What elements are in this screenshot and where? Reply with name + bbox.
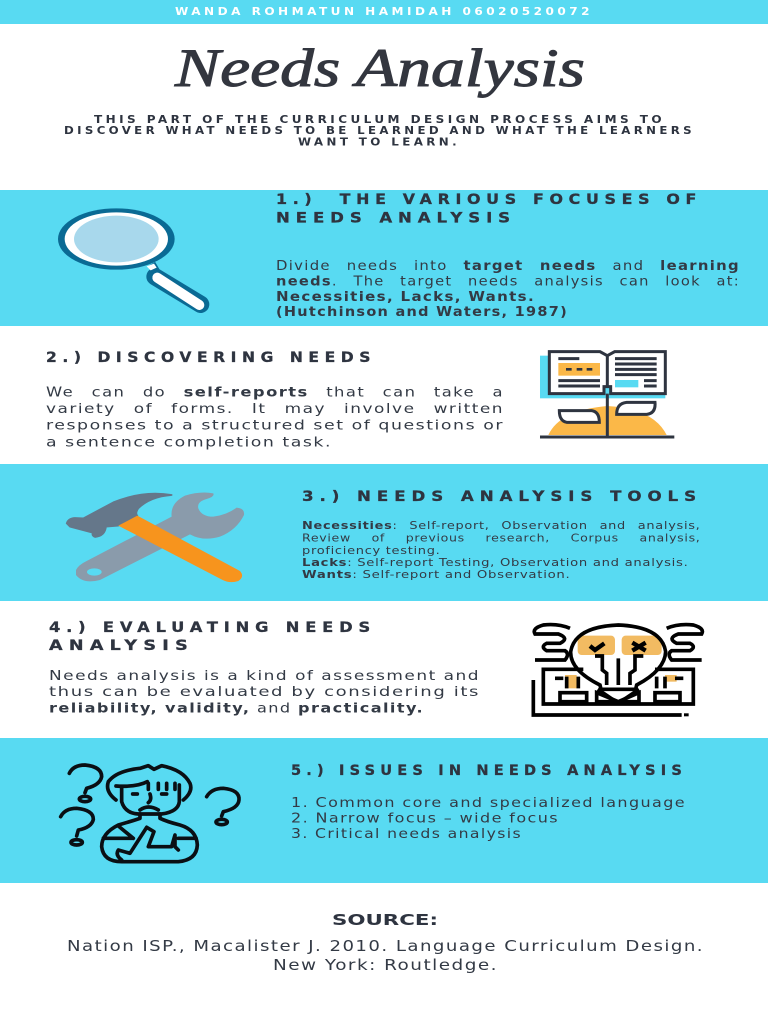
panel: various focuses — [0, 190, 768, 326]
text: section 2 body: responses to a structured set of questions or — [46, 418, 504, 434]
intro text: THIS PART OF THE CURRICULUM DESIGN PROCESS AIMS TO — [94, 114, 665, 126]
text: section 4 body — [49, 668, 480, 716]
text: section 1 body: Divide needs into target needs and learning — [276, 258, 740, 274]
heading: section 5: 5.) ISSUES IN NEEDS ANALYSIS — [291, 763, 687, 779]
text: section 4 body: thus can be evaluated by considering its — [49, 684, 480, 700]
text: section 3 body — [302, 519, 700, 581]
source — [67, 911, 704, 974]
header band — [0, 0, 768, 24]
intro text: WANT TO LEARN. — [298, 136, 460, 148]
source: New York: Routledge. — [273, 956, 498, 974]
heading: section 4: ANALYSIS — [49, 638, 194, 654]
text: section 1 body — [276, 258, 740, 320]
text: section 3 body: Lacks : Self-report Testing, Observation and analysis. — [302, 556, 688, 569]
text: section 3 body: Wants : Self-report and Observation. — [302, 568, 570, 581]
heading: section 1: NEEDS ANALYSIS — [276, 210, 516, 226]
heading: section 4: 4.) EVALUATING NEEDS — [49, 620, 376, 636]
list: issues: 1. Common core and specialized language — [291, 795, 686, 811]
list: issues: 2. Narrow focus – wide focus — [291, 810, 559, 826]
panel: needs analysis tools — [0, 464, 768, 601]
icon: confused person with question marks — [61, 765, 239, 862]
icon: light bulb with check and cross — [533, 625, 702, 716]
text: section 2 body: a sentence completion task. — [46, 434, 332, 450]
text: section 3 body: proficiency testing. — [302, 544, 440, 557]
panel: issues in needs analysis — [0, 738, 768, 883]
list: issues — [291, 795, 686, 842]
panel: discovering needs — [46, 350, 674, 450]
heading: section 3: 3.) NEEDS ANALYSIS TOOLS — [302, 489, 702, 505]
text: section 2 body: We can do self-reports that can take a — [46, 384, 504, 400]
list: issues: 3. Critical needs analysis — [291, 826, 522, 842]
panel: evaluating needs analysis — [49, 620, 702, 716]
intro text: DISCOVER WHAT NEEDS TO BE LEARNED AND WHAT THE LEARNERS — [64, 125, 695, 137]
heading: section 2: 2.) DISCOVERING NEEDS — [46, 350, 376, 366]
title: Needs Analysis — [174, 38, 585, 98]
heading: section 1 — [276, 192, 702, 226]
text: section 3 body: Necessities : Self-report, Observation and analysis, — [302, 519, 700, 532]
icon: hammer and wrench — [67, 493, 244, 582]
source: Nation ISP., Macalister J. 2010. Language Curriculum Design. — [67, 937, 704, 955]
text: section 1 body: needs . The target needs analysis can look at: — [276, 274, 740, 290]
intro text — [64, 114, 695, 148]
text: section 2 body: variety of forms. It may involve written — [46, 401, 504, 417]
heading: section 4 — [49, 620, 376, 654]
header band: WANDA ROHMATUN HAMIDAH 06020520072 — [175, 6, 593, 18]
source: SOURCE: — [332, 911, 438, 929]
text: section 2 body — [46, 384, 504, 450]
text: section 1 body: Necessities, Lacks, Wants. — [276, 289, 535, 305]
icon: open book plant — [540, 352, 674, 437]
text: section 3 body: Review of previous research, Corpus analysis, — [302, 532, 700, 544]
text: section 4 body: Needs analysis is a kind of assessment and — [49, 668, 480, 684]
text: section 1 body: (Hutchinson and Waters, 1987) — [276, 304, 568, 320]
text: section 4 body: reliability, validity, and practicality. — [49, 700, 424, 716]
heading: section 1: 1.) THE VARIOUS FOCUSES OF — [276, 192, 702, 208]
icon: magnifying glass — [58, 208, 201, 305]
